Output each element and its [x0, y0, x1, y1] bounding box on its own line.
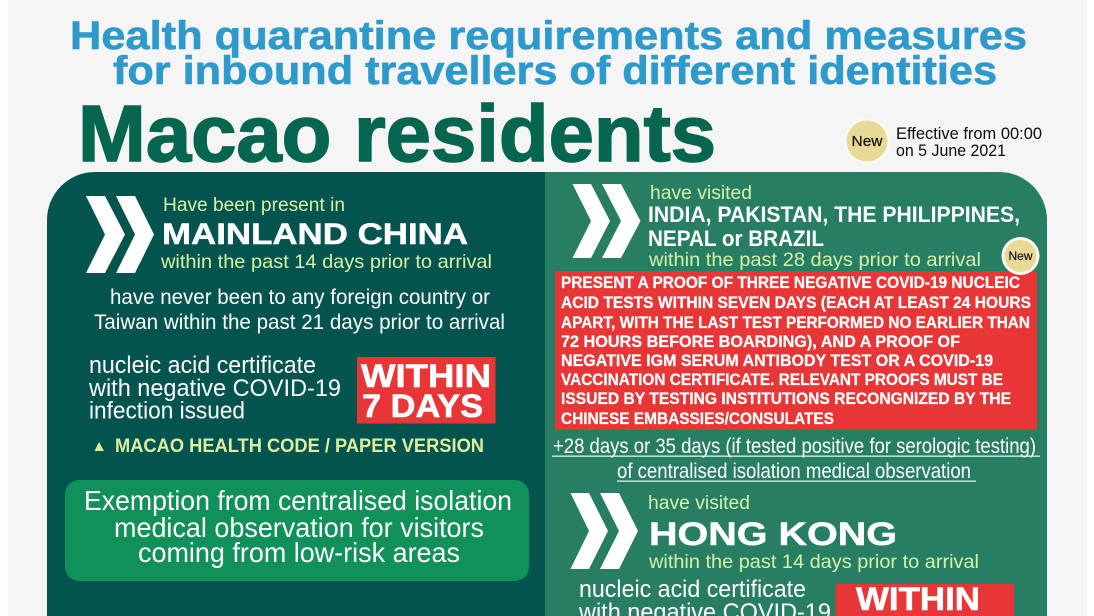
have visited label: have visited — [648, 492, 750, 514]
nucleic acid text: nucleic acid certificate — [579, 576, 806, 603]
icon: double chevron second arrow — [600, 493, 638, 569]
exemption box: medical observation for visitors — [114, 512, 484, 543]
panel: Mainland China — [47, 172, 545, 616]
isolation period text: of centralised isolation medical observation — [617, 459, 971, 483]
panel: high-risk countries and Hong Kong — [545, 172, 1047, 616]
within callout — [836, 581, 1014, 616]
icon: double chevron — [570, 493, 608, 569]
within 7 days callout — [357, 357, 496, 424]
red requirement box: VACCINATION CERTIFICATE. RELEVANT PROOFS MUST BE — [561, 371, 1003, 389]
effective date notice — [844, 118, 1042, 164]
foreign travel condition: Taiwan within the past 21 days prior to arrival — [94, 311, 505, 334]
red requirement box: ISSUED BY TESTING INSTITUTIONS RECONGNIZED BY THE — [561, 390, 1011, 408]
nucleic acid text — [88, 352, 341, 424]
effective date text — [896, 124, 1042, 160]
title: Health quarantine requirements and measures — [70, 14, 1027, 58]
within callout: WITHIN — [856, 581, 980, 616]
title — [70, 14, 1027, 93]
foreign travel condition — [94, 286, 505, 334]
within 7 days callout: WITHIN — [361, 358, 491, 394]
icon: triangle — [94, 442, 104, 451]
red requirement box: NEGATIVE IGM SERUM ANTIBODY TEST OR A COVID-19 — [561, 352, 993, 370]
region name: MAINLAND CHINA — [162, 218, 468, 251]
exemption box — [65, 480, 529, 581]
icon: double chevron — [86, 196, 125, 273]
country names: NEPAL or BRAZIL — [648, 226, 824, 251]
red requirement box: PRESENT A PROOF OF THREE NEGATIVE COVID-19 NUCLEIC — [561, 274, 1020, 292]
timeframe 28 days: within the past 28 days prior to arrival — [648, 249, 981, 271]
country names — [648, 202, 1020, 251]
icon: new badge: New — [852, 133, 883, 150]
icon: new badge: New — [1008, 249, 1033, 263]
red requirement box: CHINESE EMBASSIES/CONSULATES — [561, 410, 834, 428]
title: for inbound travellers of different identities — [113, 49, 997, 93]
have been present heading: within the past 14 days prior to arrival — [160, 251, 492, 273]
exemption box: Exemption from centralised isolation — [84, 485, 512, 516]
have been present heading — [160, 194, 492, 273]
timeframe 14 days: within the past 14 days prior to arrival — [648, 551, 979, 573]
nucleic acid text: infection issued — [89, 398, 245, 424]
exemption box: coming from low-risk areas — [138, 537, 460, 568]
icon: double chevron second arrow — [602, 184, 640, 258]
effective date text: Effective from 00:00 — [896, 124, 1042, 143]
icon: new badge — [1002, 237, 1040, 275]
have been present heading: Have been present in — [163, 194, 345, 216]
red requirement box — [555, 271, 1037, 430]
red requirement box: ACID TESTS WITHIN SEVEN DAYS (EACH AT LEAST 24 HOURS — [561, 294, 1031, 312]
within 7 days callout: 7 DAYS — [362, 388, 483, 424]
red requirement box: 72 HOURS BEFORE BOARDING), AND A PROOF OF — [561, 333, 960, 351]
effective date text: on 5 June 2021 — [896, 141, 1006, 160]
nucleic acid text: with negative COVID-19 — [88, 375, 341, 402]
isolation period text — [552, 434, 1040, 483]
country names: INDIA, PAKISTAN, THE PHILIPPINES, — [648, 202, 1020, 227]
red requirement box: APART, WITH THE LAST TEST PERFORMED NO EARLIER THAN — [561, 314, 1030, 332]
health code note: MACAO HEALTH CODE / PAPER VERSION — [115, 436, 484, 457]
region name: HONG KONG — [649, 516, 897, 552]
heading: Macao residents: Macao residents — [78, 89, 716, 178]
have visited label: have visited — [650, 182, 752, 204]
foreign travel condition: have never been to any foreign country or — [110, 286, 490, 309]
icon: double chevron second arrow — [116, 196, 154, 273]
icon: double chevron — [572, 184, 610, 258]
nucleic acid text: nucleic acid certificate — [89, 352, 316, 379]
icon: new badge — [844, 118, 890, 164]
nucleic acid text — [578, 576, 831, 616]
